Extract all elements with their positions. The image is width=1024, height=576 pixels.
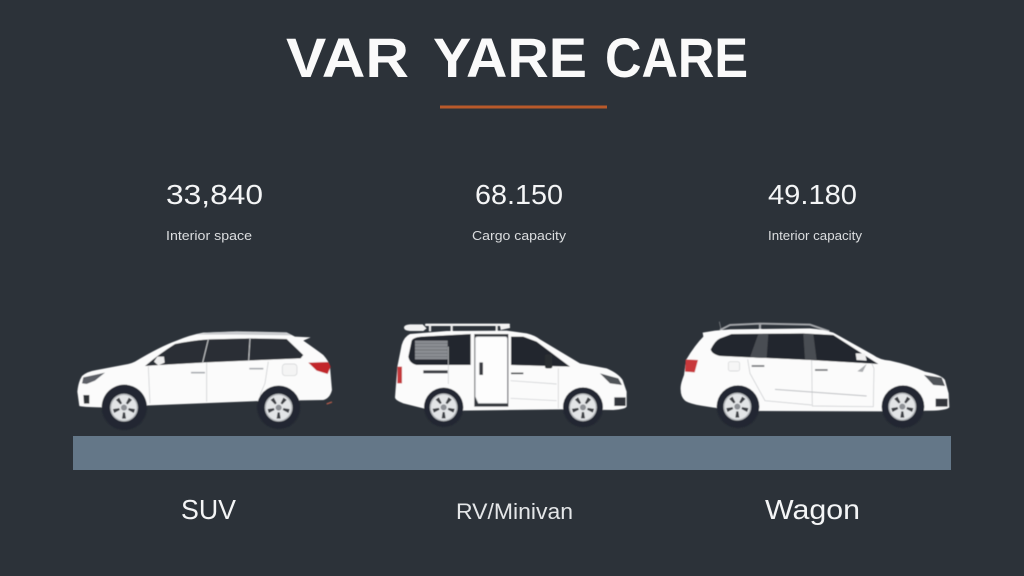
stat: cargo capacity: Cargo capacity bbox=[472, 228, 567, 243]
label: RV/Minivan: RV/Minivan bbox=[456, 499, 573, 524]
title bbox=[286, 26, 748, 89]
title: YARE bbox=[433, 26, 587, 89]
title: VAR bbox=[286, 26, 409, 89]
icon: SUV bbox=[77, 331, 332, 430]
icon: wagon bbox=[681, 322, 949, 428]
label: Wagon: Wagon bbox=[765, 494, 860, 525]
title accent rule bbox=[440, 106, 607, 108]
stat: interior space bbox=[166, 179, 263, 243]
title: CARE bbox=[605, 26, 748, 89]
stat: interior capacity: 49.180 bbox=[768, 179, 857, 210]
stat: interior capacity: Interior capacity bbox=[768, 228, 863, 243]
stat: interior space: 33,840 bbox=[166, 179, 263, 210]
icon: RV / minivan bbox=[395, 324, 627, 427]
ground bar bbox=[73, 436, 951, 470]
stat: cargo capacity: 68.150 bbox=[475, 179, 563, 210]
stat: cargo capacity bbox=[472, 179, 567, 243]
stat: interior space: Interior space bbox=[166, 228, 252, 243]
label: SUV: SUV bbox=[181, 494, 236, 525]
stat: interior capacity bbox=[768, 179, 863, 243]
